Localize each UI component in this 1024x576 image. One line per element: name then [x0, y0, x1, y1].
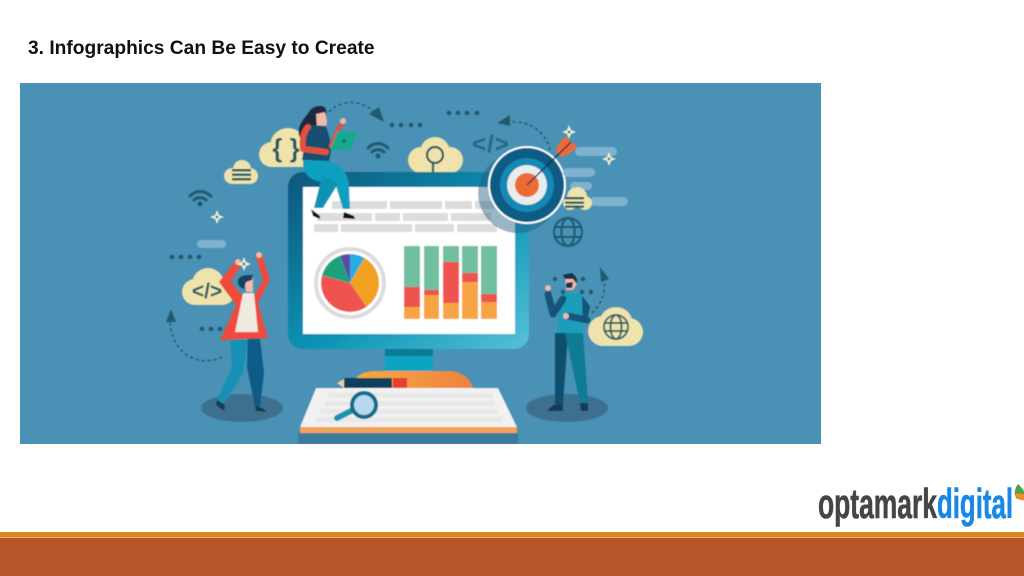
- cloud: code tag: [182, 268, 235, 305]
- stacked bar chart: [404, 246, 497, 319]
- dotted rows: [170, 111, 479, 331]
- arrow: left dashed: [166, 309, 222, 361]
- cloud: stack right: [563, 187, 592, 210]
- arrow: right dashed: [592, 267, 609, 313]
- icon: globe: [554, 218, 582, 246]
- icon: magnifying glass: [337, 393, 376, 418]
- cloud: code braces: { }: [272, 133, 300, 163]
- cloud: stack small: [224, 160, 258, 184]
- cloud: code tag: </>: [192, 280, 222, 303]
- keyboard and desk items: [298, 371, 518, 444]
- cloud: code braces: [259, 128, 312, 167]
- icon: wifi top: [368, 144, 388, 157]
- footer band: [0, 532, 1024, 576]
- arrow: top dashed: [329, 102, 384, 122]
- title: 3. Infographics Can Be Easy to Create: [28, 38, 375, 59]
- logo: optamark: [818, 480, 937, 527]
- pie chart: [316, 249, 384, 317]
- monitor: [288, 172, 529, 372]
- decorative light bars: [197, 147, 628, 248]
- arrow: target dashed: [497, 115, 550, 150]
- man with beard: [526, 273, 608, 422]
- icon: wifi left: [190, 192, 211, 205]
- sparkles: [210, 125, 616, 271]
- panel: illustration: [20, 83, 821, 444]
- target with dart: [478, 136, 577, 233]
- woman with laptop: [299, 106, 358, 219]
- cloud: globe: [588, 307, 643, 346]
- cloud: search: [408, 137, 463, 174]
- code tag glyph: </>: [472, 131, 510, 158]
- man with raised arms: [201, 252, 283, 422]
